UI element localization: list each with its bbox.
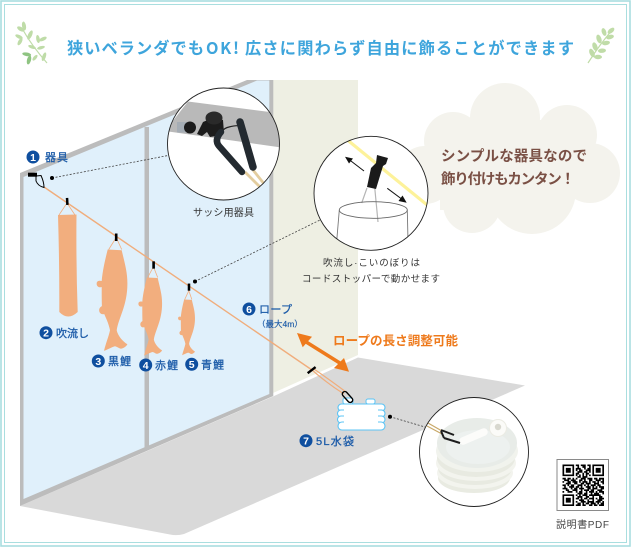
title: 狭いベランダでも (67, 39, 204, 58)
double arrow: rope length adjust (297, 333, 349, 372)
text: cloud message: シンプルな器具なので (441, 148, 587, 165)
label: rope length adjustable: ロープの長さ調整可能 (333, 333, 458, 348)
callout 1: fitting label (26, 150, 68, 164)
rope stopper (307, 366, 316, 374)
floor (20, 358, 525, 535)
caption: cord stopper: コードストッパーで動かせます (302, 274, 440, 285)
text: cloud message (441, 148, 587, 188)
rope (44, 187, 346, 394)
caption: cord stopper (302, 257, 440, 285)
callout 6: rope label: （最大4m） (257, 319, 303, 329)
callout 2: windsock label: 2 (43, 328, 49, 340)
callout 3: black carp label: 3 (95, 356, 101, 368)
caption: cord stopper: 吹流し·こいのぼりは (323, 257, 420, 269)
koi 3: black carp (97, 234, 127, 351)
icon: small water bag (338, 390, 385, 430)
magnifier: cord stopper (314, 136, 432, 250)
title (67, 35, 574, 59)
callout 3: black carp label (92, 354, 131, 368)
caption: manual PDF: 説明書PDF (556, 518, 609, 531)
callout 2: windsock label: 吹流し (56, 327, 89, 340)
magnifier: water bag (420, 398, 528, 506)
callout 5: blue carp label: 青鯉 (201, 358, 224, 372)
callout 5: blue carp label: 5 (189, 359, 195, 371)
wall (273, 80, 358, 393)
leader line: cord stopper (193, 220, 320, 284)
title: OK! (206, 35, 239, 59)
callout 2: windsock label (40, 326, 89, 340)
callout 6: rope label (242, 302, 303, 329)
callout 4: red carp label (139, 358, 178, 372)
callout 3: black carp label: 黒鯉 (108, 354, 131, 368)
title: 広さに関わらず自由に飾ることができます (245, 39, 574, 58)
window centre mullion (144, 127, 149, 449)
callout 1: fitting label: 1 (30, 152, 36, 164)
koi 5: blue carp (178, 284, 195, 355)
koi 4: red carp (138, 261, 162, 356)
leader line: water bag (388, 415, 425, 427)
callout 6: rope label: ロープ (259, 303, 292, 316)
callout 4: red carp label: 赤鯉 (155, 358, 178, 372)
panel: cloud background (396, 83, 620, 234)
QR code (557, 460, 608, 510)
text: cloud message: 飾り付けもカンタン！ (441, 170, 575, 188)
leader line: sash fitting (50, 156, 168, 180)
window glass (22, 80, 271, 501)
callout 7: water bag label: 7 (303, 436, 309, 448)
fukinagashi windsock (58, 198, 78, 316)
icon: right leaf sprig (588, 26, 615, 63)
fitting 1: sash clip (28, 173, 44, 188)
magnifier: sash fitting (165, 88, 285, 200)
callout 6: rope label: 6 (246, 304, 252, 316)
callout 7: water bag label: 5L水袋 (316, 434, 354, 448)
callout 1: fitting label: 器具 (45, 151, 68, 164)
caption: sash fitting: サッシ用器具 (193, 207, 254, 219)
icon: left leaf sprig (15, 21, 47, 65)
window frame (0, 0, 273, 506)
callout 4: red carp label: 4 (143, 360, 149, 372)
callout 7: water bag label (300, 434, 354, 448)
callout 5: blue carp label (185, 358, 224, 372)
